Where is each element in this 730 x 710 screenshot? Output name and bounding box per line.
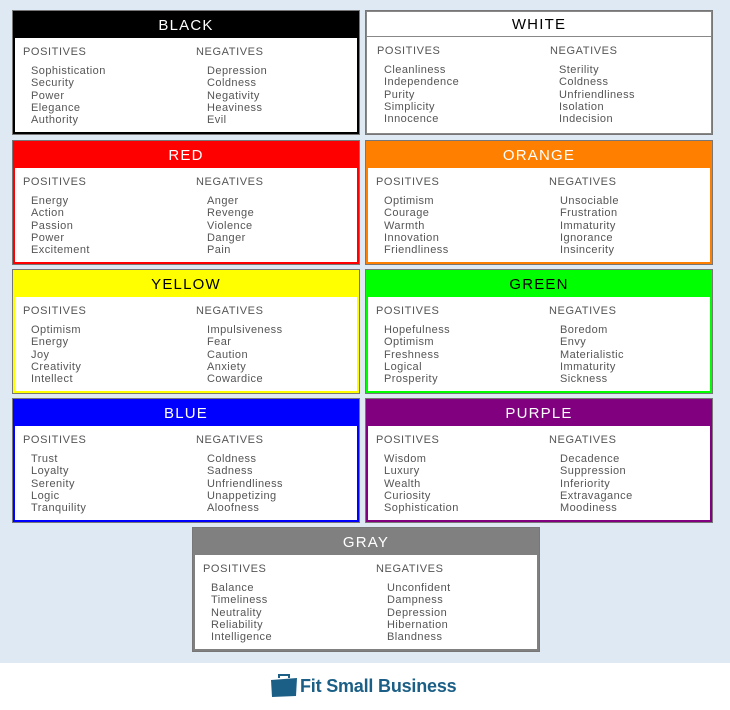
heading: black: BLACK bbox=[158, 17, 214, 34]
positives list: Courage bbox=[384, 207, 429, 219]
negatives list: Unappetizing bbox=[207, 490, 277, 502]
positives list: Prosperity bbox=[384, 373, 438, 385]
logo: Fit Small Business bbox=[271, 674, 456, 697]
positives list: Curiosity bbox=[384, 490, 431, 502]
positives list bbox=[31, 453, 86, 514]
negatives list bbox=[387, 582, 451, 643]
negatives list: Sadness bbox=[207, 465, 253, 477]
negatives list bbox=[207, 453, 283, 514]
negatives list: Sterility bbox=[559, 64, 599, 76]
positives label: POSITIVES bbox=[376, 305, 439, 317]
positives list: Hopefulness bbox=[384, 324, 450, 336]
heading: red bbox=[15, 143, 357, 168]
negatives list bbox=[207, 195, 254, 256]
positives list: Innovation bbox=[384, 232, 439, 244]
negatives list: Decadence bbox=[560, 453, 620, 465]
positives list: Security bbox=[31, 77, 74, 89]
heading: yellow: YELLOW bbox=[151, 276, 221, 293]
positives list: Sophistication bbox=[384, 502, 459, 514]
positives list: Energy bbox=[31, 336, 69, 348]
negatives list: Blandness bbox=[387, 631, 442, 643]
negatives list: Caution bbox=[207, 349, 248, 361]
positives list: Logical bbox=[384, 361, 422, 373]
negatives list: Danger bbox=[207, 232, 246, 244]
positives list: Excitement bbox=[31, 244, 90, 256]
positives list: Sophistication bbox=[31, 65, 106, 77]
negatives list: Heaviness bbox=[207, 102, 262, 114]
positives list: Optimism bbox=[384, 195, 434, 207]
positives list: Neutrality bbox=[211, 607, 262, 619]
positives label: POSITIVES bbox=[23, 176, 86, 188]
panel: black bbox=[13, 11, 359, 134]
panel: white bbox=[366, 11, 712, 134]
positives list: Optimism bbox=[31, 324, 81, 336]
positives list: Wealth bbox=[384, 478, 421, 490]
negatives list: Coldness bbox=[207, 453, 256, 465]
negatives list: Indecision bbox=[559, 113, 613, 125]
negatives list: Coldness bbox=[207, 77, 256, 89]
positives list bbox=[211, 582, 272, 643]
negatives label: NEGATIVES bbox=[376, 563, 444, 575]
negatives label: NEGATIVES bbox=[550, 45, 618, 57]
negatives list: Immaturity bbox=[560, 361, 616, 373]
positives list: Optimism bbox=[384, 336, 434, 348]
negatives list bbox=[207, 324, 283, 385]
negatives label: NEGATIVES bbox=[196, 305, 264, 317]
positives list: Action bbox=[31, 207, 64, 219]
negatives list: Depression bbox=[207, 65, 267, 77]
positives list: Reliability bbox=[211, 619, 263, 631]
heading: green: GREEN bbox=[509, 276, 569, 293]
positives list bbox=[31, 324, 81, 385]
positives list: Loyalty bbox=[31, 465, 69, 477]
positives label: POSITIVES bbox=[23, 434, 86, 446]
negatives list: Negativity bbox=[207, 90, 260, 102]
heading: orange: ORANGE bbox=[503, 147, 575, 164]
positives label: POSITIVES bbox=[376, 434, 439, 446]
positives list: Energy bbox=[31, 195, 69, 207]
negatives list: Inferiority bbox=[560, 478, 610, 490]
heading: red: RED bbox=[168, 147, 204, 164]
positives list: Luxury bbox=[384, 465, 420, 477]
positives list: Timeliness bbox=[211, 594, 268, 606]
heading: white: WHITE bbox=[512, 16, 566, 33]
positives list: Logic bbox=[31, 490, 60, 502]
positives list: Friendliness bbox=[384, 244, 449, 256]
heading: gray: GRAY bbox=[343, 534, 389, 551]
positives list: Passion bbox=[31, 220, 73, 232]
negatives list: Unconfident bbox=[387, 582, 451, 594]
positives list: Freshness bbox=[384, 349, 439, 361]
panel: orange bbox=[366, 141, 712, 264]
positives list: Balance bbox=[211, 582, 254, 594]
heading: white bbox=[367, 12, 711, 37]
negatives list: Ignorance bbox=[560, 232, 613, 244]
positives label: POSITIVES bbox=[23, 305, 86, 317]
negatives list: Aloofness bbox=[207, 502, 259, 514]
icon: briefcase bbox=[271, 674, 297, 697]
positives list: Innocence bbox=[384, 113, 439, 125]
heading: blue: BLUE bbox=[164, 405, 208, 422]
negatives list: Immaturity bbox=[560, 220, 616, 232]
positives list bbox=[384, 64, 459, 125]
negatives list: Anger bbox=[207, 195, 239, 207]
positives list: Trust bbox=[31, 453, 58, 465]
negatives list: Unsociable bbox=[560, 195, 619, 207]
negatives list: Fear bbox=[207, 336, 231, 348]
positives label: POSITIVES bbox=[376, 176, 439, 188]
negatives list bbox=[560, 453, 633, 514]
negatives list: Revenge bbox=[207, 207, 254, 219]
positives list: Creativity bbox=[31, 361, 81, 373]
positives list bbox=[384, 324, 450, 385]
negatives list: Dampness bbox=[387, 594, 443, 606]
panel: red bbox=[13, 141, 359, 264]
panel: blue bbox=[13, 399, 359, 522]
positives list: Independence bbox=[384, 76, 459, 88]
negatives list: Depression bbox=[387, 607, 447, 619]
positives list bbox=[384, 195, 449, 256]
positives list: Authority bbox=[31, 114, 78, 126]
positives list: Warmth bbox=[384, 220, 425, 232]
negatives list: Violence bbox=[207, 220, 253, 232]
negatives list: Envy bbox=[560, 336, 586, 348]
heading: purple: PURPLE bbox=[505, 405, 573, 422]
positives label: POSITIVES bbox=[377, 45, 440, 57]
negatives list bbox=[207, 65, 267, 126]
heading: orange bbox=[368, 143, 710, 168]
positives label: POSITIVES bbox=[203, 563, 266, 575]
panel: green bbox=[366, 270, 712, 393]
heading: gray bbox=[195, 530, 537, 555]
heading: green bbox=[368, 272, 710, 297]
negatives list bbox=[560, 195, 619, 256]
positives list: Intellect bbox=[31, 373, 73, 385]
negatives label: NEGATIVES bbox=[196, 434, 264, 446]
positives list bbox=[31, 65, 106, 126]
negatives list: Boredom bbox=[560, 324, 608, 336]
positives label: POSITIVES bbox=[23, 46, 86, 58]
negatives list: Insincerity bbox=[560, 244, 614, 256]
negatives label: NEGATIVES bbox=[549, 434, 617, 446]
positives list: Power bbox=[31, 90, 64, 102]
positives list: Purity bbox=[384, 89, 415, 101]
negatives list: Suppression bbox=[560, 465, 626, 477]
positives list: Joy bbox=[31, 349, 49, 361]
panel: purple bbox=[366, 399, 712, 522]
negatives list: Moodiness bbox=[560, 502, 617, 514]
positives list: Cleanliness bbox=[384, 64, 446, 76]
positives list: Power bbox=[31, 232, 64, 244]
negatives list: Impulsiveness bbox=[207, 324, 283, 336]
heading: blue bbox=[15, 401, 357, 426]
heading: purple bbox=[368, 401, 710, 426]
heading: yellow bbox=[15, 272, 357, 297]
positives list: Simplicity bbox=[384, 101, 435, 113]
negatives list: Extravagance bbox=[560, 490, 633, 502]
negatives label: NEGATIVES bbox=[549, 305, 617, 317]
negatives label: NEGATIVES bbox=[196, 46, 264, 58]
panel: gray bbox=[193, 528, 539, 651]
negatives list bbox=[560, 324, 624, 385]
negatives list: Pain bbox=[207, 244, 231, 256]
positives list: Serenity bbox=[31, 478, 75, 490]
negatives list: Sickness bbox=[560, 373, 608, 385]
negatives list: Coldness bbox=[559, 76, 608, 88]
positives list: Wisdom bbox=[384, 453, 426, 465]
negatives list: Evil bbox=[207, 114, 227, 126]
heading: black bbox=[15, 13, 357, 38]
positives list bbox=[31, 195, 90, 256]
panel: yellow bbox=[13, 270, 359, 393]
positives list bbox=[384, 453, 459, 514]
positives list: Intelligence bbox=[211, 631, 272, 643]
negatives list: Frustration bbox=[560, 207, 618, 219]
negatives label: NEGATIVES bbox=[549, 176, 617, 188]
negatives list: Hibernation bbox=[387, 619, 448, 631]
negatives list bbox=[559, 64, 635, 125]
negatives list: Anxiety bbox=[207, 361, 246, 373]
positives list: Elegance bbox=[31, 102, 80, 114]
positives list: Tranquility bbox=[31, 502, 86, 514]
negatives list: Unfriendliness bbox=[207, 478, 283, 490]
logo text: Fit Small Business bbox=[300, 676, 456, 696]
negatives list: Cowardice bbox=[207, 373, 263, 385]
negatives label: NEGATIVES bbox=[196, 176, 264, 188]
negatives list: Unfriendliness bbox=[559, 89, 635, 101]
negatives list: Materialistic bbox=[560, 349, 624, 361]
negatives list: Isolation bbox=[559, 101, 604, 113]
